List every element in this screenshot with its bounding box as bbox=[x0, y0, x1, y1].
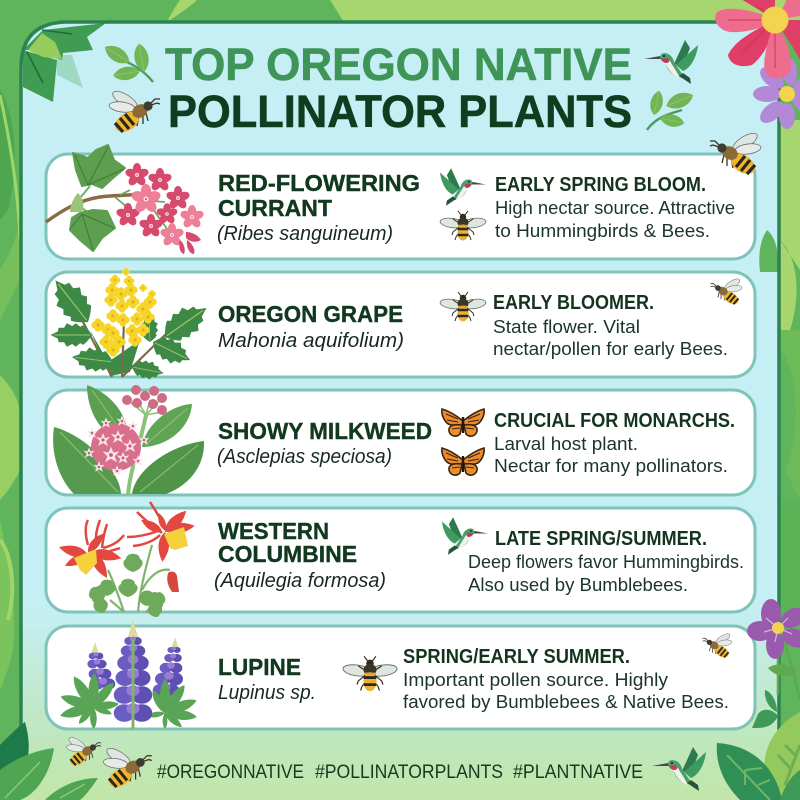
note: SPRING/EARLY SUMMER. bbox=[403, 646, 630, 668]
title: POLLINATOR PLANTS bbox=[168, 86, 632, 137]
icon: bee on card corner bbox=[710, 130, 762, 178]
icon: bumblebee bbox=[439, 292, 487, 322]
icon: bumblebee bbox=[439, 211, 487, 240]
note: Deep flowers favor Hummingbirds. bbox=[468, 551, 744, 572]
note: Nectar for many pollinators. bbox=[494, 455, 728, 476]
panel: card red-flowering currant bbox=[46, 145, 755, 259]
note: Also used by Bumblebees. bbox=[468, 574, 688, 595]
plant name: LUPINE bbox=[218, 654, 301, 680]
plant name bbox=[218, 518, 357, 567]
icon: purple flower lower-right bbox=[747, 599, 800, 728]
hashtags: #PLANTNATIVE bbox=[513, 762, 643, 783]
panel: card oregon grape bbox=[44, 268, 755, 382]
latin name: (Aquilegia formosa) bbox=[214, 569, 386, 592]
background leaf behind first card bbox=[759, 230, 778, 272]
lupine leaves bbox=[59, 673, 198, 730]
note: nectar/pollen for early Bees. bbox=[493, 338, 728, 359]
illustration: columbine bbox=[58, 502, 195, 619]
panel: card showy milkweed bbox=[46, 385, 755, 495]
icon: bottom-right leaves bbox=[717, 712, 800, 800]
note: Larval host plant. bbox=[494, 433, 638, 454]
panel: card western columbine bbox=[46, 502, 755, 619]
icon: small bee bbox=[710, 277, 742, 307]
illustration: milkweed bbox=[53, 385, 204, 495]
icon: leaf sprig top-left bbox=[101, 41, 153, 82]
icon: hummingbird bottom bbox=[652, 747, 706, 791]
illustration: lupine bbox=[59, 620, 198, 730]
hashtags: #OREGONNATIVE bbox=[157, 762, 304, 783]
latin name: Lupinus sp. bbox=[218, 681, 316, 704]
note: favored by Bumblebees & Native Bees. bbox=[403, 691, 729, 712]
plant name: WESTERN bbox=[218, 518, 329, 544]
plant name: SHOWY MILKWEED bbox=[218, 418, 432, 444]
icon: bee by title bbox=[108, 88, 160, 136]
panel: card red-flowering currant: CURRANT bbox=[218, 195, 333, 221]
icon: pink flower top-right bbox=[715, 0, 800, 79]
icon: small bee bbox=[702, 632, 732, 660]
latin name: (Ribes sanguineum) bbox=[217, 222, 393, 245]
latin name: (Asclepias speciosa) bbox=[217, 445, 392, 468]
central lupine spike bbox=[114, 620, 152, 729]
note: to Hummingbirds & Bees. bbox=[495, 220, 710, 241]
note bbox=[495, 174, 735, 241]
hashtags bbox=[157, 762, 643, 783]
latin name: Mahonia aquifolium) bbox=[218, 329, 404, 352]
icon: hummingbird by title bbox=[644, 40, 698, 84]
note bbox=[494, 410, 735, 476]
yellow blossoms bbox=[91, 268, 157, 357]
note: LATE SPRING/SUMMER. bbox=[495, 528, 707, 550]
icon: hummingbird bbox=[442, 517, 488, 555]
note: State flower. Vital bbox=[493, 316, 640, 337]
icon: purple flower top-right bbox=[753, 58, 800, 129]
note bbox=[493, 292, 728, 359]
note: Important pollen source. Highly bbox=[403, 669, 669, 690]
icon: monarch butterfly bbox=[442, 448, 484, 475]
note: CRUCIAL FOR MONARCHS. bbox=[494, 410, 735, 432]
illustration: currant bbox=[46, 145, 205, 254]
title: TOP OREGON NATIVE bbox=[165, 39, 632, 90]
title bbox=[165, 39, 632, 137]
icon: monarch butterfly bbox=[442, 409, 484, 436]
hashtags: #POLLINATORPLANTS bbox=[315, 762, 503, 783]
plant name: OREGON GRAPE bbox=[218, 301, 403, 327]
icon: leaf sprig top-right bbox=[647, 89, 696, 130]
plant name: RED-FLOWERING bbox=[218, 170, 420, 196]
panel: card lupine bbox=[46, 620, 755, 730]
illustration: oregon grape bbox=[44, 268, 215, 382]
note bbox=[468, 528, 744, 595]
note: High nectar source. Attractive bbox=[495, 197, 735, 218]
icon: bottom-left leaves bbox=[0, 722, 98, 800]
icon: bee bottom larger bbox=[103, 745, 152, 791]
note bbox=[403, 646, 729, 712]
icon: corner leaves top-left bbox=[23, 23, 106, 102]
icon: bee bottom bbox=[66, 735, 101, 768]
note: EARLY SPRING BLOOM. bbox=[495, 174, 706, 196]
icon: hummingbird bbox=[440, 168, 486, 206]
right bloom bbox=[127, 502, 195, 562]
side lupine spikes bbox=[87, 637, 183, 696]
note: EARLY BLOOMER. bbox=[493, 292, 654, 314]
plant name: COLUMBINE bbox=[218, 541, 357, 567]
icon: bumblebee bbox=[342, 656, 398, 691]
left bloom bbox=[58, 520, 124, 581]
